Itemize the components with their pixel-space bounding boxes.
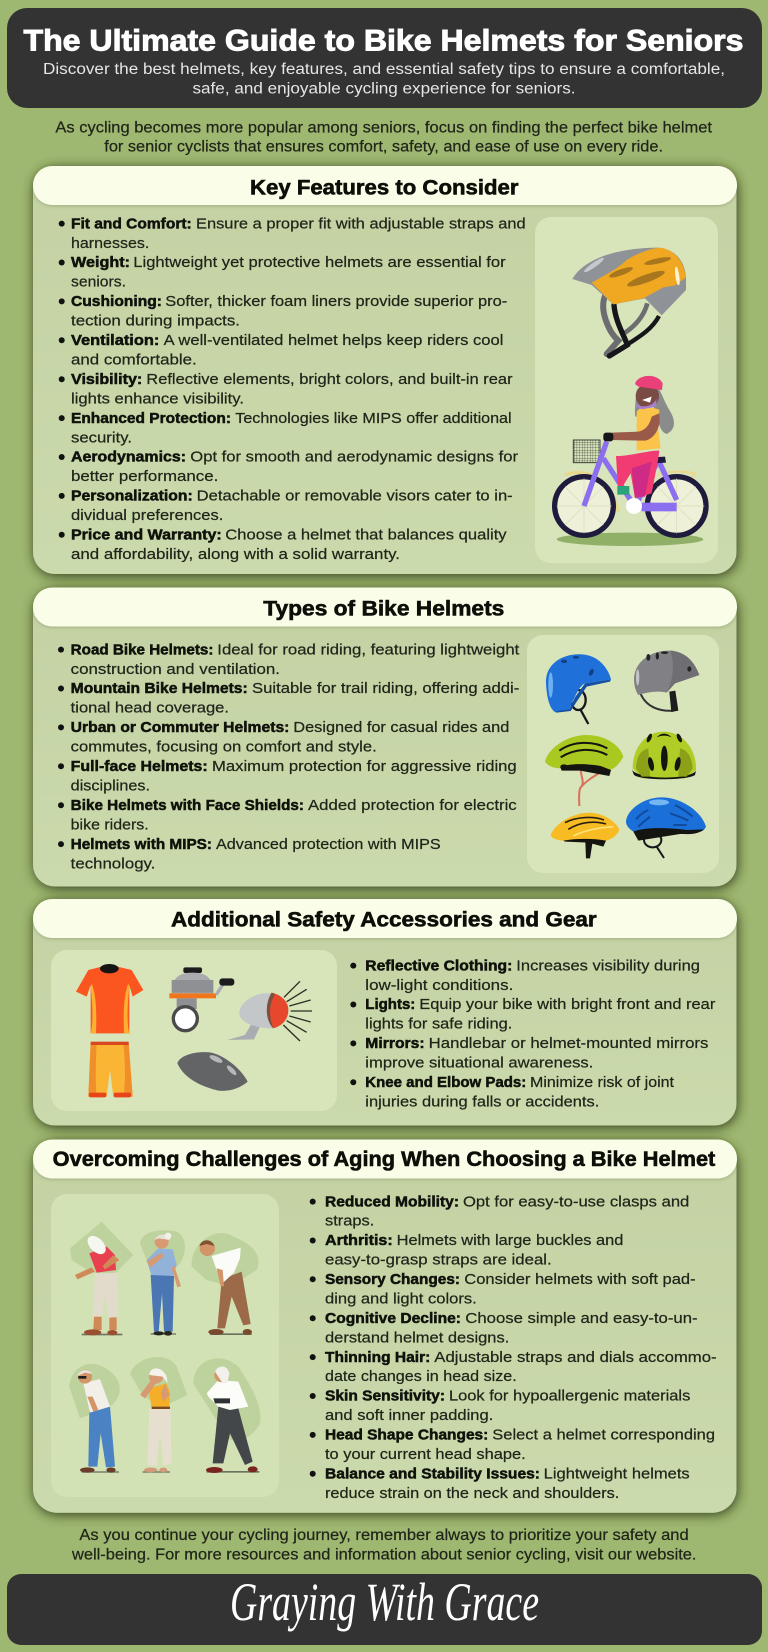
list: key features: Fit and Comfort: [71,215,192,232]
icon: senior woman on purple bicycle [555,376,706,546]
list: accessories: injuries during falls or accidents. [365,1094,599,1110]
list: key features: better performance. [71,468,218,485]
image panel: helmet and cyclist [535,217,718,563]
list: key features: Opt for smooth and aerodynamic designs for [190,449,518,466]
list: challenges: Skin Sensitivity: [325,1388,445,1405]
heading bar: accessories: Additional Safety Accessories and Gear [171,908,597,932]
list: key features: and comfortable. [71,352,197,368]
list: challenges: Reduced Mobility: [325,1193,459,1210]
list: types: Ideal for road riding, featuring lightweight [217,641,520,658]
list: key features: lights enhance visibility. [71,390,244,407]
list: key features: Choose a helmet that balances quality [225,526,507,544]
panel: additional safety accessories [33,899,737,1126]
list: challenges: Balance and Stability Issues: [325,1465,540,1482]
heading bar: key features: Key Features to Consider [250,175,519,199]
list: key features: Reflective elements, bright colors, and built-in rear [146,371,513,388]
list: key features: dividual preferences. [71,507,223,524]
list: key features: seniors. [71,274,126,291]
list: key features: tection during impacts. [71,313,240,330]
list: key features: Enhanced Protection: [71,410,231,427]
list: types: construction and ventilation. [71,661,280,678]
list: accessories: Equip your bike with bright front and rear [419,996,715,1013]
list: challenges: Choose simple and easy-to-un- [465,1310,698,1327]
list: key features [59,215,526,563]
list: challenges: Arthritis: [325,1232,393,1249]
list: challenges: Consider helmets with soft pad- [464,1271,696,1288]
subtitle [43,61,725,97]
list: key features: and affordability, along with a solid warranty. [71,546,400,563]
list: challenges: Adjustable straps and dials accommo- [434,1349,717,1366]
subtitle: Discover the best helmets, key features, and essential safety tips to ensure a comfortable, [43,61,725,78]
list: accessories: Lights: [365,996,415,1013]
list: key features: Lightweight yet protective helmets are essential for [133,254,506,271]
list: accessories: Increases visibility during [516,957,700,974]
image panel: six helmets [527,635,719,873]
list: accessories: Mirrors: [365,1035,425,1052]
footer banner [7,1572,762,1645]
icon: bicycle bell [169,967,234,1031]
list: types [58,641,520,872]
heading bar: key features [33,166,737,205]
list: types: Added protection for electric [308,797,517,814]
list: accessories: Reflective Clothing: [365,957,512,974]
list: accessories: Handlebar or helmet-mounted mirrors [429,1035,708,1052]
list: challenges: Helmets with large buckles and [397,1232,623,1249]
icon: orange and gray helmet [572,248,686,356]
header banner [7,8,762,108]
panel: key features [33,166,737,574]
list: key features: Ensure a proper fit with adjustable straps and [196,215,526,232]
list: key features: Detachable or removable visors cater to in- [197,488,513,505]
icon: bike light with rays [227,981,312,1041]
icon: orange cycling shorts [88,1042,133,1097]
heading bar: types: Types of Bike Helmets [263,597,504,621]
list: challenges: date changes in head size. [325,1368,517,1385]
figure: woman in yellow top [130,1357,187,1473]
brand name: Graying With Grace [230,1572,539,1632]
list: challenges: Sensory Changes: [325,1271,460,1288]
image panel: safety gear [51,950,337,1111]
list: types: Helmets with MIPS: [71,836,212,853]
list: types: technology. [71,855,155,872]
list: key features: Visibility: [71,371,142,388]
list: challenges: to your current head shape. [325,1446,526,1463]
icon: yellow road helmet [551,813,619,858]
list: types: Bike Helmets with Face Shields: [71,797,304,814]
list: challenges: and soft inner padding. [325,1407,493,1424]
icon: gray helmet shell [177,1052,248,1091]
closing text: As you continue your cycling journey, remember always to prioritize your safety and [79,1527,689,1544]
list: types: Urban or Commuter Helmets: [71,719,289,736]
panel: types of bike helmets [33,588,737,886]
list: accessories: Knee and Elbow Pads: [365,1074,526,1091]
intro text: for senior cyclists that ensures comfort, safety, and ease of use on every ride. [104,139,663,156]
list: accessories: lights for safe riding. [365,1016,512,1033]
figure: woman in red top [70,1222,133,1335]
image panel: six seniors with aches [51,1194,279,1497]
list: types: Designed for casual rides and [293,719,509,736]
list: challenges: reduce strain on the neck and shoulders. [325,1485,619,1502]
figure: older man with dark trousers [193,1358,260,1473]
list: accessories: low-light conditions. [365,977,513,994]
heading bar: challenges [33,1140,737,1178]
list: key features: Personalization: [71,488,193,505]
icon: gray skate helmet [634,651,699,712]
figure: woman in blue shirt [140,1230,185,1336]
icon: blue skate helmet [546,654,611,724]
icon: blue urban helmet [626,797,706,858]
list: challenges: Thinning Hair: [325,1349,430,1366]
list: challenges: Head Shape Changes: [325,1427,488,1444]
list: key features: security. [71,429,132,446]
list: types: Full-face Helmets: [71,758,208,775]
icon: lime helmet front view [632,732,696,779]
list: types: disciplines. [71,778,150,794]
list: challenges: Opt for easy-to-use clasps and [463,1193,689,1210]
subtitle: safe, and enjoyable cycling experience for seniors. [192,80,576,97]
list: challenges: easy-to-grasp straps are ideal. [325,1252,552,1269]
heading bar: types [33,588,737,626]
list: challenges: Look for hypoallergenic materials [449,1388,690,1405]
list: key features: harnesses. [71,235,149,252]
list: types: commutes, focusing on comfort and style. [71,739,377,756]
list: key features: Technologies like MIPS offer additional [235,410,512,427]
title: The Ultimate Guide to Bike Helmets for Seniors [24,25,744,58]
list: types: Road Bike Helmets: [71,641,213,658]
list: key features: Weight: [71,254,130,271]
figure: bent man in white shirt [192,1233,258,1335]
heading bar: accessories [33,899,737,938]
list: key features: Aerodynamics: [71,449,186,466]
list: challenges [310,1193,717,1502]
list: types: Suitable for trail riding, offering addi- [252,680,519,697]
intro text: As cycling becomes more popular among seniors, focus on finding the perfect bike helmet [55,119,713,136]
icon: lime road helmet [545,735,623,806]
heading bar: challenges: Overcoming Challenges of Aging When Choosing a Bike Helmet [53,1147,715,1171]
list: accessories: Minimize risk of joint [530,1074,675,1091]
list: key features: Softer, thicker foam liners provide superior pro- [165,293,507,310]
list: challenges: derstand helmet designs. [325,1329,509,1346]
list: key features: A well-ventilated helmet helps keep riders cool [164,332,503,349]
list: challenges: Cognitive Decline: [325,1310,461,1327]
panel: challenges of aging [33,1140,737,1513]
list: types: Mountain Bike Helmets: [71,680,248,697]
icon: orange jersey [76,964,143,1033]
list: key features: Cushioning: [71,293,162,310]
list: key features: Price and Warranty: [71,526,222,544]
closing text: well-being. For more resources and information about senior cycling, visit our website. [71,1546,697,1563]
list: types: Maximum protection for aggressive riding [212,758,517,775]
list: types: Advanced protection with MIPS [216,836,441,853]
figure: man in blue trousers [69,1364,120,1473]
list: types: bike riders. [71,816,149,833]
list: challenges: Lightweight helmets [544,1465,690,1482]
list: types: tional head coverage. [71,700,229,717]
intro text [55,119,713,156]
list: accessories: improve situational awareness. [365,1055,593,1072]
list: challenges: straps. [325,1213,374,1230]
list: challenges: ding and light colors. [325,1290,477,1308]
closing text [71,1527,697,1563]
list: accessories [350,957,715,1110]
list: key features: Ventilation: [71,332,159,349]
list: challenges: Select a helmet corresponding [492,1427,715,1444]
